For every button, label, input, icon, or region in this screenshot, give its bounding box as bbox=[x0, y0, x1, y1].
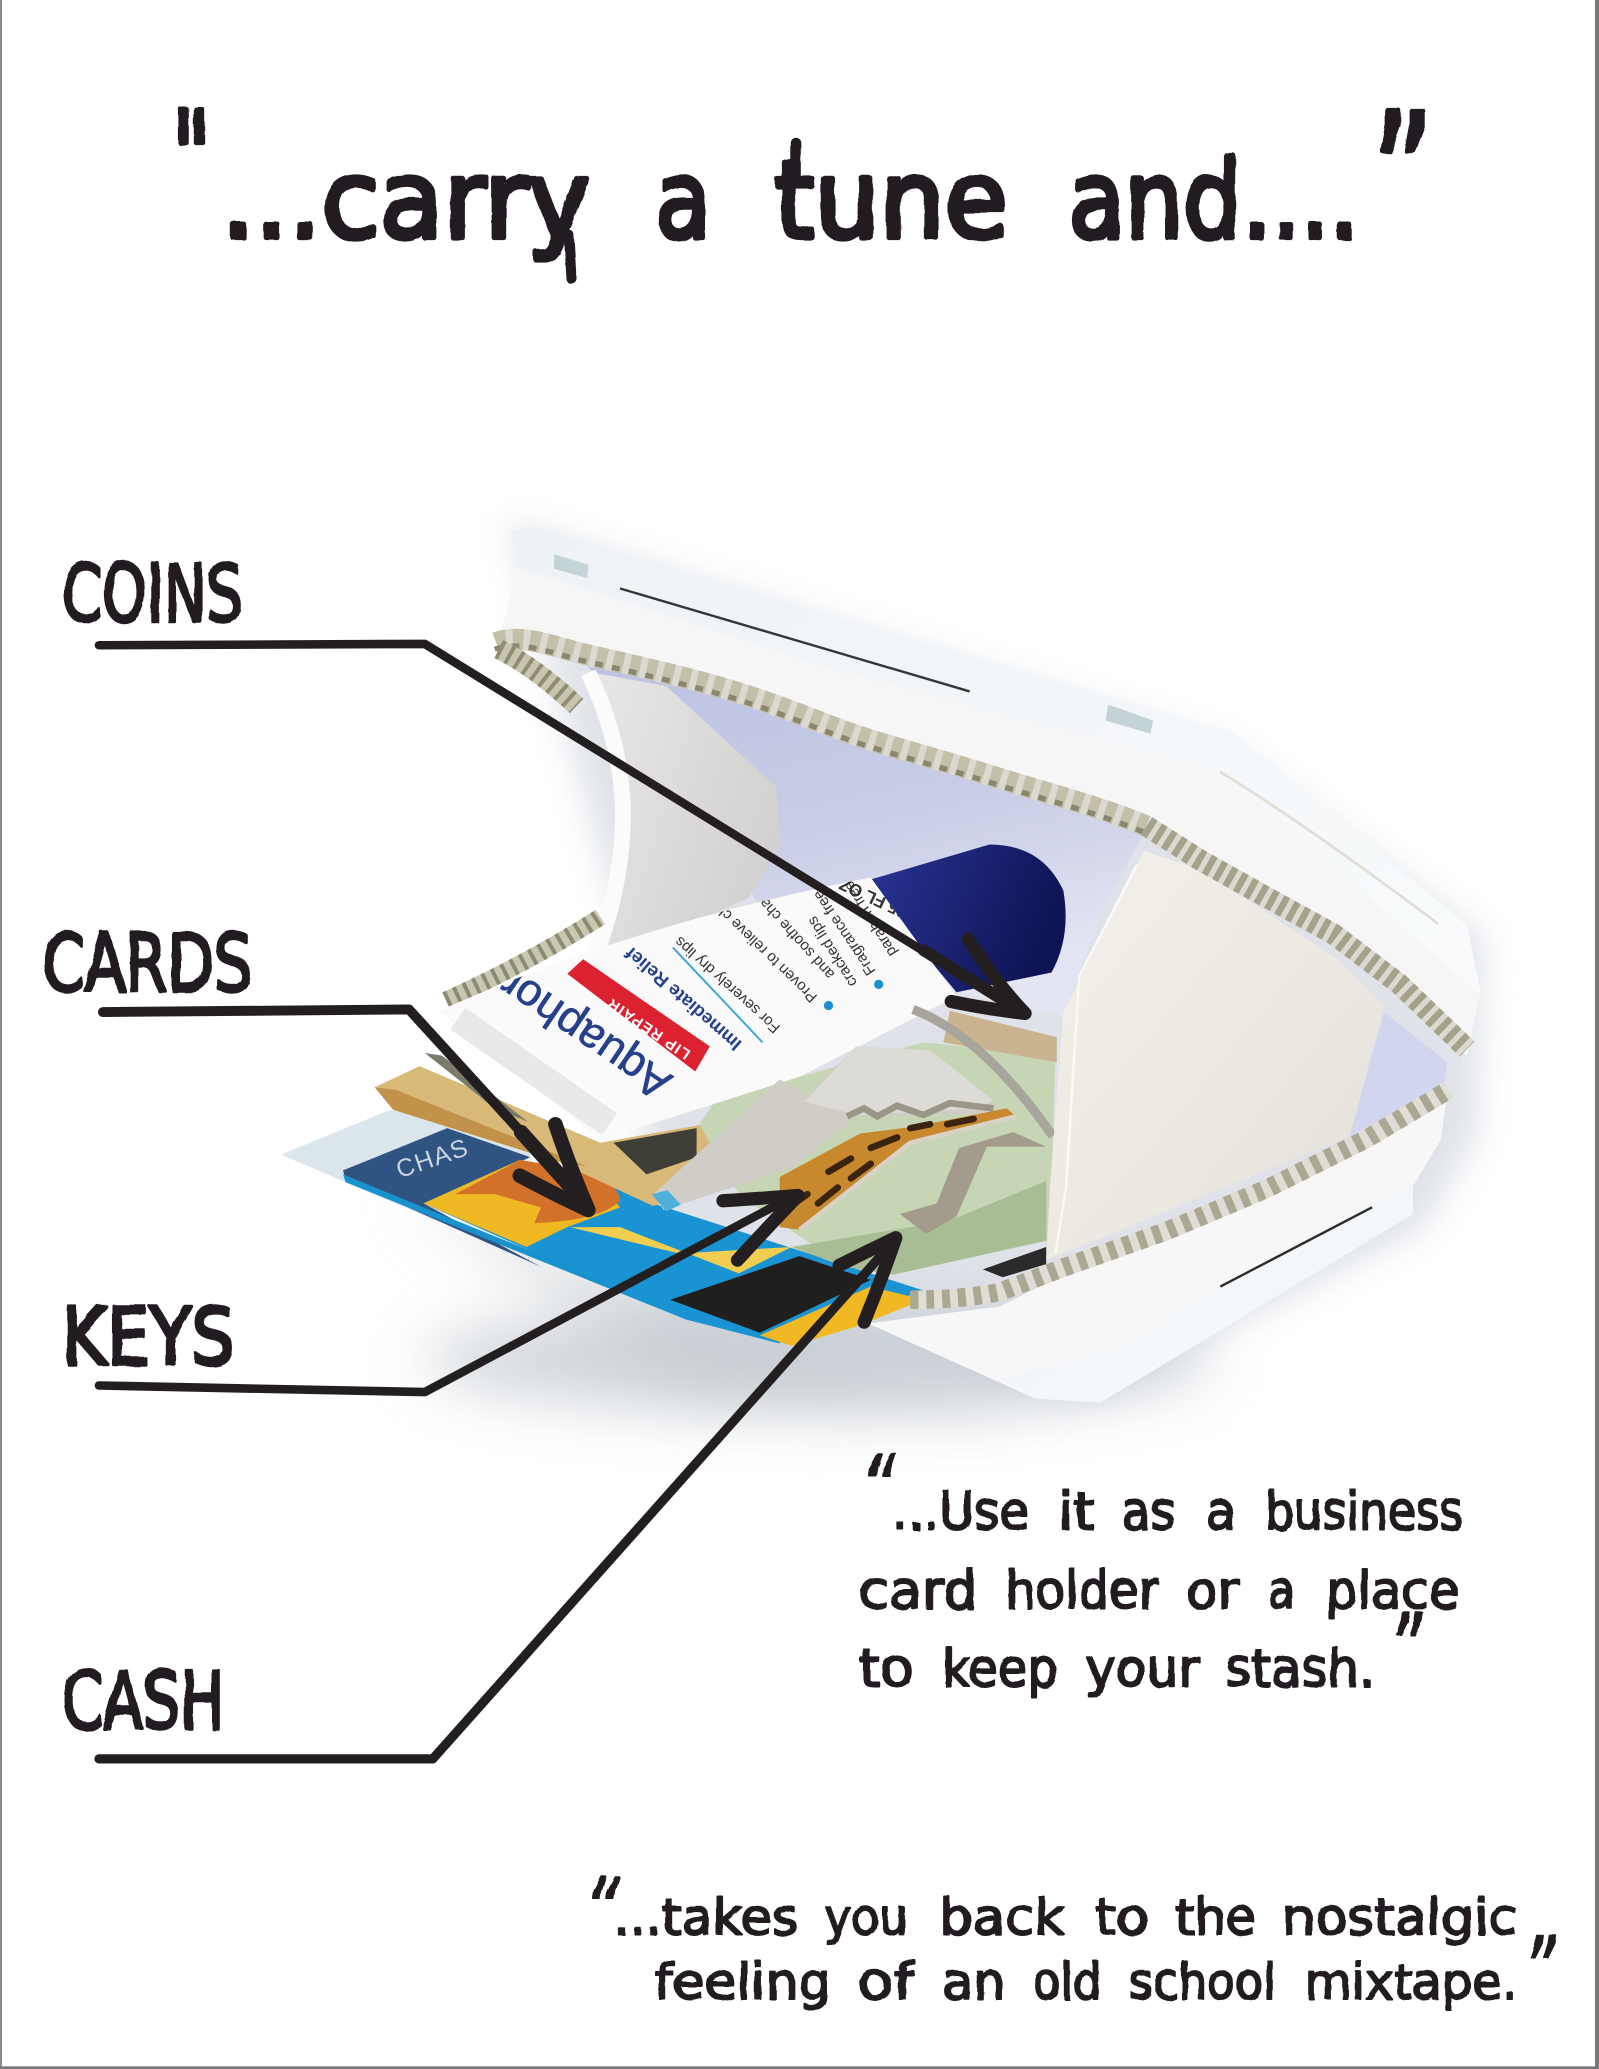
folded cash bbox=[375, 1011, 1057, 1277]
tube copy: Immediate Relief bbox=[620, 943, 745, 1055]
title: " bbox=[172, 85, 211, 227]
quote: business card holder: or bbox=[1186, 1560, 1239, 1621]
front bottom band bbox=[868, 1095, 1447, 1403]
quote: business card holder bbox=[859, 1438, 1463, 1700]
title: and.... bbox=[1069, 138, 1359, 264]
title bbox=[172, 79, 1434, 278]
tube copy: and soothe chapped bbox=[734, 869, 838, 983]
label: keys: KEYS bbox=[62, 1291, 235, 1383]
lip balm tube bbox=[439, 844, 1066, 1140]
right inner flap bbox=[1046, 851, 1384, 1260]
arrow: cards bbox=[103, 1009, 590, 1210]
quote: nostalgic mixtape: feeling bbox=[654, 1952, 831, 2011]
title: tune bbox=[774, 138, 1008, 264]
quote: business card holder: place bbox=[1326, 1560, 1459, 1621]
key ring bbox=[913, 1009, 1053, 1136]
quote: business card holder: to bbox=[859, 1638, 914, 1699]
wallet lavender lining bbox=[587, 666, 1447, 1136]
quote: business card holder: a bbox=[1268, 1560, 1296, 1621]
quote: nostalgic mixtape: you bbox=[825, 1887, 908, 1946]
product photo: open zip wallet bbox=[281, 521, 1484, 1415]
tube cap bbox=[864, 844, 1066, 992]
red label band: LIP REPAIR bbox=[604, 994, 694, 1062]
arrow: coins bbox=[99, 644, 1025, 1013]
keys bbox=[652, 1009, 1053, 1234]
quote: business card holder: business bbox=[1265, 1481, 1463, 1542]
wallet shadow bbox=[396, 521, 1484, 1415]
quote: business card holder: card bbox=[859, 1560, 978, 1621]
arrow: cash bbox=[99, 1238, 896, 1759]
quote: nostalgic mixtape: an bbox=[942, 1952, 1005, 2011]
main top zipper bbox=[495, 639, 1467, 1049]
tube copy bbox=[623, 882, 900, 1052]
quote: nostalgic mixtape: the bbox=[1176, 1887, 1256, 1946]
quote: nostalgic mixtape: “ bbox=[584, 1860, 619, 1964]
quote: business card holder: holder bbox=[1005, 1560, 1159, 1621]
label: coins: COINS bbox=[62, 548, 243, 640]
quote: business card holder: stash. bbox=[1226, 1638, 1375, 1699]
bottom zipper bbox=[910, 1090, 1449, 1300]
quote: nostalgic mixtape: to bbox=[1095, 1887, 1149, 1946]
title: ” bbox=[1372, 79, 1434, 272]
quote: business card holder: a bbox=[1206, 1481, 1236, 1542]
tube copy: cracked lips bbox=[804, 913, 861, 990]
label: cards: CARDS bbox=[42, 918, 252, 1010]
quote: business card holder: as bbox=[1121, 1481, 1176, 1542]
cards bbox=[281, 1110, 924, 1346]
quote: nostalgic mixtape: nostalgic bbox=[1282, 1887, 1517, 1946]
quote: business card holder: keep bbox=[942, 1638, 1058, 1699]
tube copy: .35 FL OZ bbox=[836, 874, 915, 925]
quote: business card holder: ” bbox=[1388, 1596, 1423, 1700]
tube copy: Proven to relieve chapped bbox=[682, 871, 821, 1006]
quote: business card holder: ...Use bbox=[893, 1481, 1029, 1542]
quote: nostalgic mixtape: old bbox=[1033, 1952, 1102, 2011]
left inner flap bbox=[580, 670, 781, 983]
quote: nostalgic mixtape: back bbox=[939, 1887, 1065, 1946]
quote: nostalgic mixtape: ” bbox=[1522, 1920, 1557, 2024]
tube copy: paraben free bbox=[841, 878, 901, 960]
quote: nostalgic mixtape: mixtape. bbox=[1305, 1952, 1517, 2011]
tube copy: For severely dry lips bbox=[671, 933, 784, 1036]
arrow: keys bbox=[99, 1194, 798, 1392]
quote: nostalgic mixtape: school bbox=[1129, 1952, 1276, 2011]
title: ...carry bbox=[222, 138, 590, 264]
tube brand: Aquaphor bbox=[490, 960, 680, 1111]
quote: nostalgic mixtape: ...takes bbox=[613, 1887, 798, 1946]
cards: CHAS bbox=[393, 1133, 472, 1184]
tube copy: Fragrance free bbox=[810, 887, 879, 978]
quote: business card holder: “ bbox=[860, 1438, 896, 1542]
tube body bbox=[439, 877, 956, 1140]
red label band bbox=[567, 959, 710, 1071]
label: cash: CASH bbox=[62, 1656, 224, 1748]
quote: business card holder: it bbox=[1058, 1481, 1095, 1542]
quote: nostalgic mixtape bbox=[584, 1860, 1557, 2024]
title: a bbox=[656, 138, 711, 264]
wallet back shell bbox=[499, 528, 1480, 1056]
quote: business card holder: your bbox=[1086, 1638, 1200, 1699]
leopard print key bbox=[780, 1108, 1016, 1230]
quote: nostalgic mixtape: of bbox=[858, 1952, 916, 2011]
left lower zipper bbox=[446, 917, 600, 1000]
